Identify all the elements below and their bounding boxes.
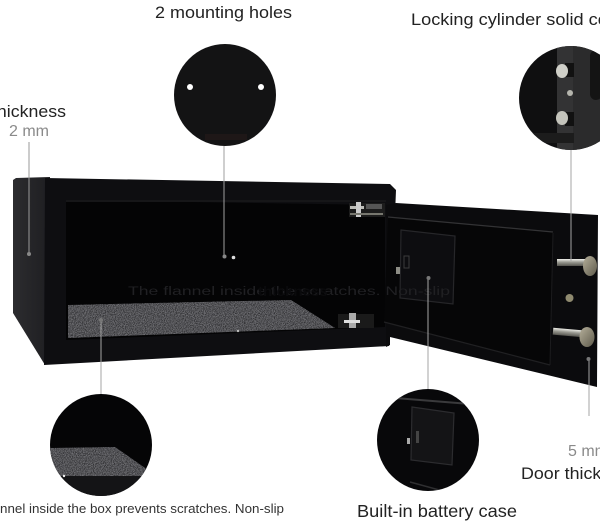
centre screw: [566, 294, 574, 302]
overlapping caption on safe: thickness: [258, 283, 328, 299]
lower locking bolt: [553, 327, 594, 347]
carpet floor: [68, 300, 335, 338]
label: flannel caption: nnel inside the box prevents scratches. Non-slip: [0, 501, 284, 516]
safe left side panel: [13, 177, 50, 365]
safe body: [13, 177, 396, 365]
upper locking bolt: [557, 256, 597, 276]
overlapping caption on safe: The flannel inside the scratches. Non-slip: [128, 286, 450, 298]
callout circle: battery case: [377, 389, 479, 497]
callout circle: flannel: [48, 394, 152, 498]
label: 2 mounting holes: 2 mounting holes: [155, 3, 292, 22]
mounting hole dots: [232, 256, 235, 259]
callout circle: mounting holes: [174, 44, 276, 146]
overlapping caption on safe: [128, 283, 450, 299]
leader line: battery case: [426, 276, 430, 390]
battery case on door: [396, 230, 455, 304]
leader line: door thickness: [586, 357, 590, 416]
callout circle: locking cylinder: [519, 46, 600, 150]
door panel: [386, 203, 598, 387]
safe interior: [66, 200, 385, 340]
lower hinge: [338, 313, 374, 328]
upper hinge: [349, 202, 385, 217]
label: 2 mm: 2 mm: [9, 123, 49, 140]
label: built-in battery case: Built-in battery case: [357, 501, 517, 521]
safe front frame: [44, 178, 396, 365]
leader line: flannel: [99, 318, 103, 395]
leader line: locking cylinder: [570, 150, 572, 261]
leader line: body thickness: [27, 142, 31, 256]
leader line: mounting holes: [222, 146, 226, 258]
safe door: [384, 203, 598, 387]
